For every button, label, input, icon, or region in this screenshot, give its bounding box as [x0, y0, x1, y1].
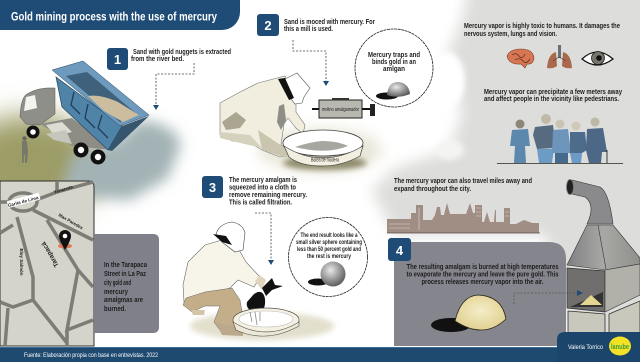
- illustration: worker squeezing cloth over basin: [183, 222, 334, 340]
- step 3: heading: remove remaining mercury.: [229, 192, 307, 199]
- author tab with logo: [557, 332, 640, 362]
- step 3: heading: squeezed into a cloth to: [229, 184, 296, 192]
- map panel: Tarapacá: [40, 240, 61, 268]
- step 1: heading: 1: [114, 52, 121, 67]
- callout: mercury traps gold: Mercury traps and: [368, 52, 420, 59]
- step 4: panel: [388, 238, 566, 346]
- illustration: amalgam mill: molino amalgamador: [322, 107, 359, 113]
- step 1: heading: Sand with gold nuggets is extracted: [133, 49, 231, 56]
- callout: mercury traps gold: binds gold in an: [372, 59, 416, 66]
- map panel: Eloy Salmón: [19, 248, 24, 276]
- location note panel: city gold and: [104, 280, 131, 287]
- step 3: heading: The mercury amalgam is: [229, 177, 297, 184]
- footer bar: Fuente: Elaboración propia con base en entrevistas. 2022: [24, 352, 158, 359]
- location note panel: amalgmas are: [104, 297, 143, 304]
- callout: silver sphere result: The end result looks like a: [300, 233, 358, 239]
- map panel: Max Paredes: [58, 212, 84, 231]
- step 1: heading: [107, 48, 231, 70]
- arrow: step 1 to truck: [153, 63, 194, 110]
- icon: brain: [507, 49, 534, 68]
- arrow: step 3 to cloth: [255, 213, 274, 265]
- step 4: panel: 4: [396, 243, 404, 258]
- callout: silver sphere result: the rest is mercury: [307, 254, 352, 260]
- step 3: heading: This is called filtration.: [229, 200, 292, 206]
- author tab with logo: lanube: [611, 344, 629, 351]
- illustration: worker panning with basin: Batea de madera: [311, 158, 339, 164]
- author tab with logo: Valeria Torrico: [568, 344, 603, 351]
- text: vapor travels: expand throughout the city.: [394, 186, 471, 193]
- title banner: [0, 0, 240, 30]
- illustration: amalgam mill: [312, 98, 375, 118]
- illustration: gold dome: [431, 295, 506, 332]
- location note panel: [94, 234, 159, 333]
- illustration: small person by truck: [22, 136, 28, 163]
- text: vapor travels: [394, 178, 532, 193]
- illustration: dump truck: [20, 61, 149, 164]
- illustration: worker panning with basin: [220, 73, 367, 170]
- illustration: city skyline: [387, 203, 540, 233]
- callout: mercury traps gold: amlgan: [383, 66, 405, 73]
- icon: eye: [582, 52, 613, 65]
- map panel: [0, 181, 94, 346]
- text: vapor travels: The mercury vapor can also travel miles away and: [394, 178, 532, 185]
- location note panel: Street in La Paz: [104, 271, 146, 278]
- arrow: furnace to gold: [514, 290, 583, 304]
- callout: silver sphere result: [288, 218, 368, 296]
- step 3: heading: [202, 176, 307, 206]
- step 2: heading: 2: [264, 18, 272, 33]
- step 4: panel: The resulting amalgam is burned at high temperatures: [406, 264, 559, 271]
- step 2: heading: Sand is moced with mercury. For: [284, 19, 375, 26]
- step 3: heading: 3: [209, 180, 216, 195]
- illustration: group of pedestrians: [497, 114, 623, 164]
- step 1: heading: from the river bed.: [131, 56, 184, 63]
- arrow: step 2 to mill: [293, 40, 329, 86]
- icon: lungs: [547, 45, 572, 68]
- step 4: panel: process releases mercury vapor into the air.: [422, 279, 544, 286]
- footer bar: [0, 347, 640, 362]
- map panel: Garita de Lima: [7, 195, 39, 208]
- location note panel: In the Tarapaca: [104, 262, 147, 269]
- location note panel: mercury: [104, 289, 128, 296]
- illustration: furnace with chimney: [566, 180, 640, 345]
- step 2: heading: [257, 14, 375, 36]
- callout: mercury traps gold: [355, 29, 433, 107]
- title banner: Gold mining process with the use of mercury: [11, 10, 217, 24]
- callout: silver sphere result: less than 50 percent gold and: [297, 247, 361, 253]
- location note panel: burned.: [104, 306, 126, 313]
- text: toxic vapor: [464, 23, 620, 38]
- step 4: panel: to evaporate the mercury and leave the pure gold. This: [406, 272, 559, 278]
- callout: silver sphere result: small silver sphere containing: [296, 240, 362, 246]
- map panel: Yanacota: [53, 184, 74, 195]
- text: pedestrians: [484, 89, 622, 103]
- text: toxic vapor: nervous system, lungs and vision.: [464, 31, 557, 38]
- step 2: heading: this a mill is used.: [284, 26, 333, 33]
